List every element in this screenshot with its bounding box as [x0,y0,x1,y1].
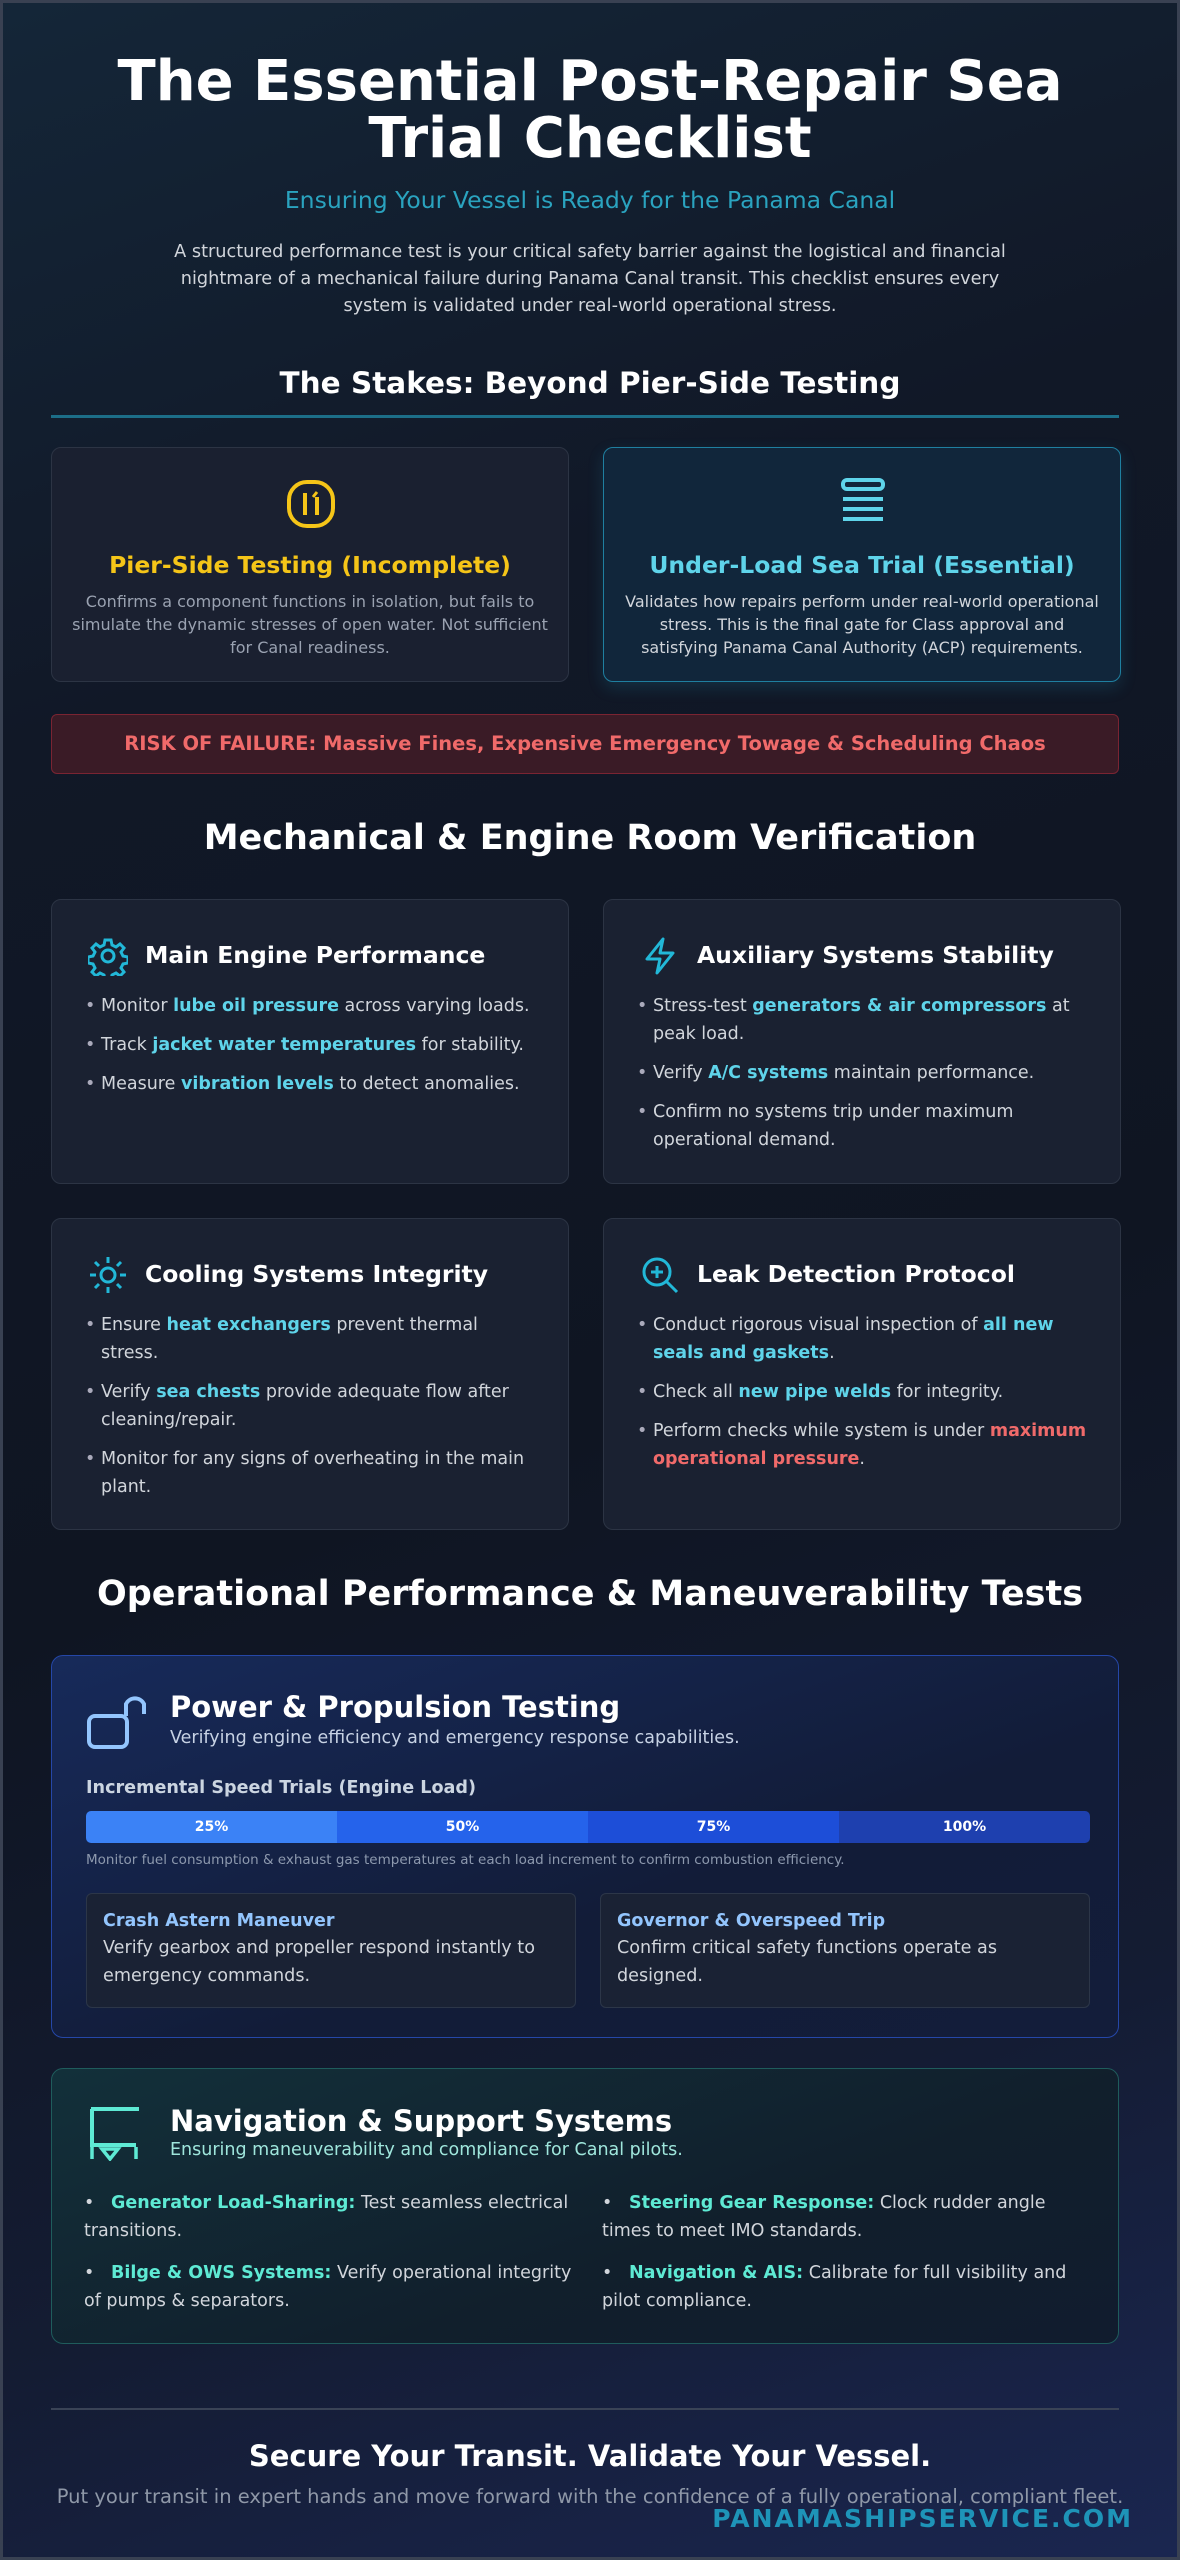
sub-card: crash astern: Verify gearbox and propeller respond instantly to emergency commands. [103,1938,535,1986]
bullets: Conduct rigorous visual inspection of all new seals and gaskets. [653,1315,1054,1363]
panel: under-load sea trial [603,447,1121,682]
bullet: bilge: • Bilge & OWS Systems: Verify operational integrity of pumps & separators. [84,2263,571,2311]
icon: gear [88,938,128,976]
heading: operational: Operational Performance & Maneuverability Tests [97,1574,1083,1614]
panel: leak detection [603,1218,1121,1530]
panel subtitle: Verifying engine efficiency and emergency response capabilities. [170,1728,740,1748]
footer heading: Secure Your Transit. Validate Your Vessel. [249,2439,931,2473]
bullets: Measure vibration levels to detect anomalies. [101,1074,520,1094]
sub-card: crash astern: Crash Astern Maneuver [103,1911,335,1931]
bullets: Check all new pipe welds for integrity. [653,1382,1003,1402]
chart note: Monitor fuel consumption & exhaust gas temperatures at each load increment to confirm combustion efficiency. [86,1852,845,1868]
intro paragraph: A structured performance test is your critical safety barrier against the logistical and financial nightmare of a mechanical failure during Panama Canal transit. This checklist ensures every system is validated under real-world operational stress. [174,242,1006,316]
bullets: Track jacket water temperatures for stability. [101,1035,524,1055]
panel: navigation & support [51,2068,1119,2344]
panel: pier-side testing [51,447,569,682]
icon: stack [841,478,885,521]
bar chart: engine load increments: 100% [943,1819,986,1835]
risk banner: RISK OF FAILURE: Massive Fines, Expensive Emergency Towage & Scheduling Chaos [124,732,1046,755]
bullet: generator: • Generator Load-Sharing: Test seamless electrical transitions. [84,2193,568,2241]
card title: Auxiliary Systems Stability [697,941,1054,969]
brand: PANAMASHIPSERVICE.COM [712,2504,1133,2533]
icon: sun [90,1257,126,1293]
card title: Leak Detection Protocol [697,1260,1015,1288]
bullet: steering: • Steering Gear Response: Clock rudder angle times to meet IMO standards. [602,2193,1046,2241]
risk banner [51,714,1119,774]
bar chart: engine load increments: 75% [697,1819,730,1835]
bar chart: engine load increments: 25% [195,1819,228,1835]
card title: Pier-Side Testing (Incomplete) [109,551,511,579]
chart label: Incremental Speed Trials (Engine Load) [86,1778,476,1798]
title: The Essential Post-Repair Sea [118,49,1062,114]
bullets: Monitor lube oil pressure across varying loads. [101,996,530,1016]
panel: auxiliary systems [603,899,1121,1184]
sub-card: governor [600,1893,1090,2008]
sub-card: governor: Confirm critical safety functions operate as designed. [617,1938,997,1986]
card title: Main Engine Performance [145,941,485,969]
card text: Validates how repairs perform under real-world operational stress. This is the final gate for Class approval and satisfying Panama Canal Authority (ACP) requirements. [625,592,1099,657]
bullets: Monitor for any signs of overheating in the main plant. [101,1449,524,1497]
bullets [640,996,1070,1150]
title [118,49,1062,171]
icon: magnifier [642,1258,678,1293]
bullets: Verify A/C systems maintain performance. [653,1063,1034,1083]
bullet: navigation: • Navigation & AIS: Calibrate for full visibility and pilot compliance. [602,2263,1066,2311]
icon: unlock [87,1696,146,1749]
bullets: Perform checks while system is under maximum operational pressure. [653,1421,1086,1469]
subtitle: Ensuring Your Vessel is Ready for the Panama Canal [285,186,895,214]
bullets [640,1315,1086,1469]
icon: warning [287,480,335,528]
panel: main engine [51,899,569,1184]
bar chart: engine load increments: 50% [446,1819,479,1835]
card title: Cooling Systems Integrity [145,1260,488,1288]
heading: mechanical: Mechanical & Engine Room Verification [204,818,976,858]
bullets: Verify sea chests provide adequate flow after cleaning/repair. [101,1382,509,1430]
heading: stakes: The Stakes: Beyond Pier-Side Testing [280,366,900,400]
panel: cooling systems [51,1218,569,1530]
footer text: Put your transit in expert hands and move forward with the confidence of a fully operational, compliant fleet. [57,2485,1123,2508]
bar chart: engine load increments [86,1811,1090,1843]
panel: power & propulsion [51,1655,1119,2038]
card text: Confirms a component functions in isolation, but fails to simulate the dynamic stresses of open water. Not sufficient for Canal readiness. [72,592,548,657]
bullets: Stress-test generators & air compressors at peak load. [653,996,1070,1044]
panel subtitle: Ensuring maneuverability and compliance for Canal pilots. [170,2140,683,2160]
icon: navigation [90,2107,139,2161]
panel title: Navigation & Support Systems [170,2104,672,2138]
sub-card: crash astern [86,1893,576,2008]
bullets [88,1315,524,1497]
bullets: Ensure heat exchangers prevent thermal stress. [101,1315,478,1363]
icon: lightning [645,938,675,974]
sub-card: governor: Governor & Overspeed Trip [617,1911,885,1931]
title: Trial Checklist [368,106,812,171]
panel title: Power & Propulsion Testing [170,1690,620,1724]
bullets: Confirm no systems trip under maximum operational demand. [653,1102,1013,1150]
bullets [88,996,530,1094]
card title: Under-Load Sea Trial (Essential) [649,551,1075,579]
